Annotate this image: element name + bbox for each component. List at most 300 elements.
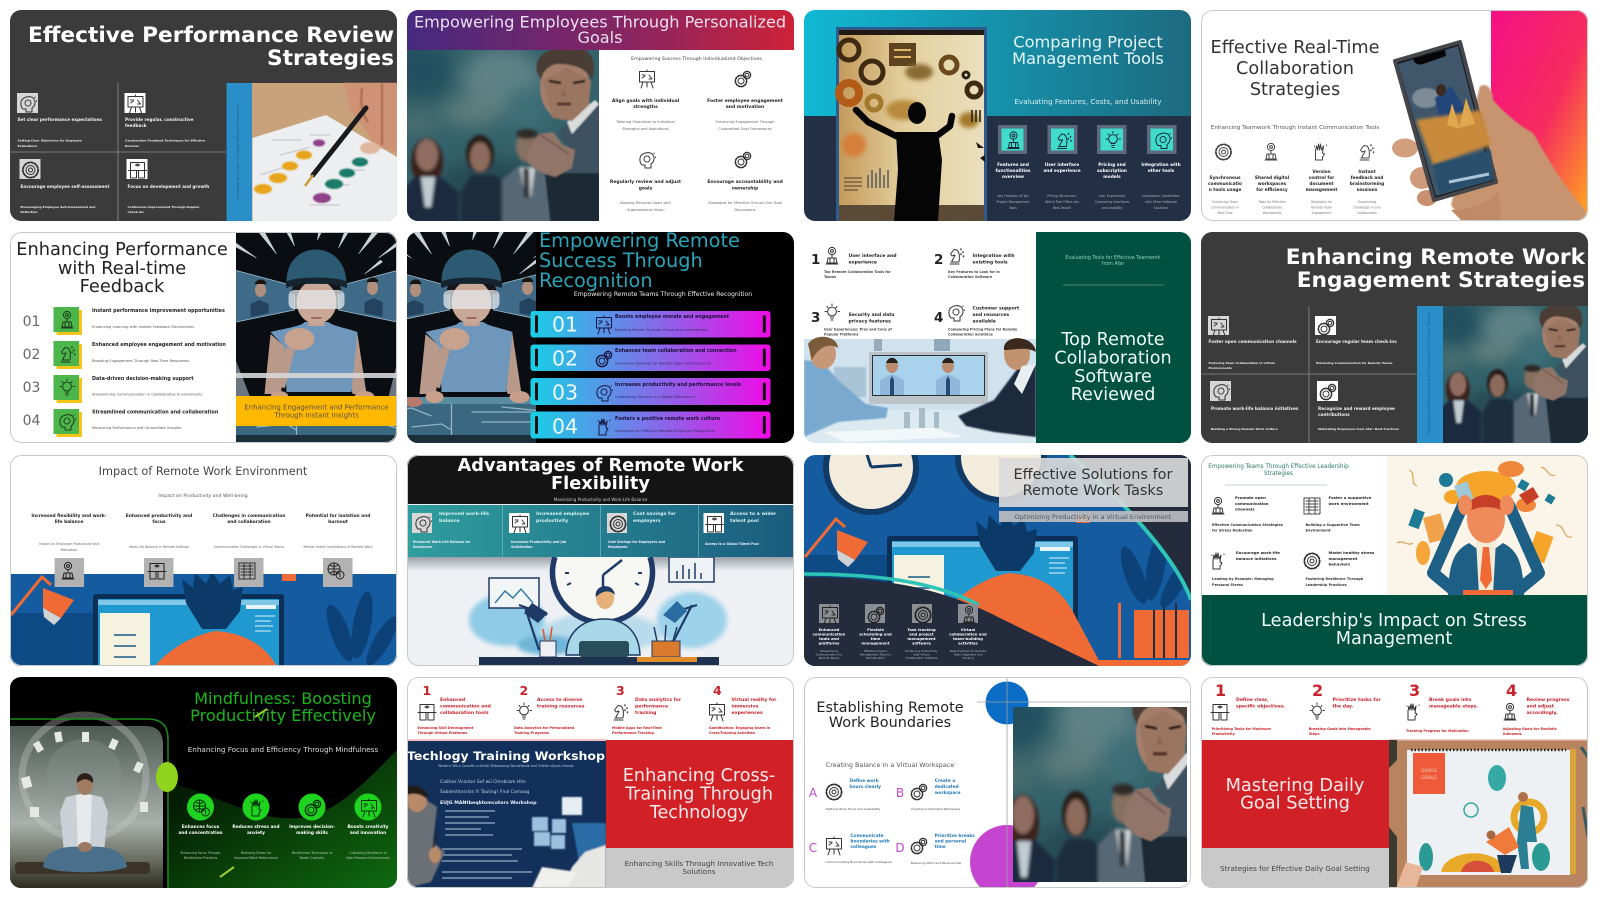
panel: Establishing Remote Work Boundaries bbox=[804, 677, 1208, 900]
strategy labels: management bbox=[1306, 187, 1337, 193]
feature captions: Which Tool Offers the bbox=[1045, 200, 1079, 204]
benefit labels: Improves decision- bbox=[289, 824, 335, 830]
cell: communication channels: Environments bbox=[1208, 366, 1232, 370]
title box bbox=[606, 740, 794, 848]
photo: woman in visor bbox=[236, 232, 397, 443]
column labels: and collaboration bbox=[227, 519, 271, 525]
panel: Effective Solutions for Remote Work Tasks bbox=[802, 411, 1197, 673]
item: open communication bbox=[1212, 495, 1283, 532]
feature labels: Features and bbox=[997, 162, 1029, 168]
step 2 bbox=[1309, 681, 1382, 736]
icon: gear head bbox=[17, 93, 38, 113]
step 3: tracking bbox=[635, 710, 656, 716]
boundary B bbox=[896, 778, 961, 811]
strategy captions: Collaborative bbox=[1262, 206, 1282, 210]
step 2: Training Programs bbox=[514, 731, 549, 735]
icon: easel bbox=[124, 93, 146, 113]
title: Strategies bbox=[1250, 80, 1340, 100]
strategy captions: Remote Team bbox=[1311, 206, 1332, 210]
panel: Comparing Project Management Tools bbox=[804, 10, 1191, 221]
benefit labels: Enhances focus bbox=[182, 824, 220, 830]
title: Establishing Remote bbox=[816, 700, 964, 716]
bar 03: 03 bbox=[552, 380, 578, 404]
benefit band: Employees bbox=[413, 545, 432, 549]
solution captions: Effective Project bbox=[864, 649, 888, 653]
feature captions: with Other Software bbox=[1145, 200, 1177, 204]
benefit labels: making skills bbox=[296, 830, 328, 836]
column labels: Challenges in communication bbox=[213, 513, 285, 519]
photo: notebook with goals: GOALS bbox=[1421, 769, 1437, 774]
step 1 bbox=[418, 683, 491, 735]
item 1: 1 bbox=[811, 252, 820, 268]
subtitle box bbox=[1201, 848, 1389, 888]
item 1: experience bbox=[848, 260, 877, 266]
list item 01 bbox=[23, 307, 225, 335]
strategy labels: for efficiency bbox=[1256, 187, 1288, 193]
header gradient with title: Goals bbox=[577, 28, 623, 47]
photo: hand holding phone bbox=[1392, 42, 1588, 222]
cell: recognition: Motivating Employees from Afar: Best Practices bbox=[1318, 427, 1399, 431]
feature labels: and experience bbox=[1043, 168, 1081, 174]
cell: communication channels bbox=[1208, 316, 1297, 370]
boundary C: boundaries with bbox=[850, 838, 890, 844]
boundary D: D bbox=[895, 841, 905, 855]
strategy captions: Real-Time bbox=[1217, 211, 1233, 215]
benefit band: Enhanced Work-Life Balance for bbox=[413, 540, 471, 544]
step 3: 3 bbox=[616, 683, 625, 698]
column captions: Communication Challenges in Virtual Teams bbox=[214, 545, 284, 549]
strategy captions: Tools for Effective bbox=[1257, 200, 1286, 204]
panel: Enhancing Cross-Training Through Technology bbox=[407, 677, 794, 888]
benefit band: balance bbox=[439, 518, 460, 524]
step 3: Break goals into bbox=[1429, 698, 1471, 703]
item: work-life balance: balance initiatives bbox=[1236, 556, 1277, 561]
cell: recognition: contributions bbox=[1318, 412, 1350, 417]
boundary D bbox=[895, 833, 975, 865]
list item 03: Streamlining Communication in Collaborative Environments bbox=[92, 392, 203, 396]
cell: recognition bbox=[1317, 381, 1399, 431]
photo: video conference bbox=[804, 337, 1036, 443]
feature captions: Tools bbox=[1008, 206, 1017, 210]
strategy captions: Workspaces bbox=[1263, 211, 1282, 215]
boundary A: Define work bbox=[850, 779, 879, 784]
solution captions: Streamlining bbox=[820, 649, 838, 653]
block: foster engagement: and motivation bbox=[726, 104, 764, 110]
bar 01: 01 bbox=[552, 312, 578, 336]
item 3: Popular Platforms bbox=[824, 332, 859, 336]
benefit captions: Cultivating Resilience in bbox=[349, 851, 387, 855]
title: Mindfulness: Boosting bbox=[194, 689, 372, 708]
feature captions: Solutions bbox=[1154, 206, 1169, 210]
cell: work-life balance: Promote work-life balance initiatives bbox=[1211, 406, 1298, 411]
item 2: existing tools bbox=[972, 260, 1008, 266]
strategy captions: Enhancing Team bbox=[1212, 200, 1238, 204]
illustration: worker at laptop bbox=[10, 574, 397, 666]
photo: man pointing bbox=[1443, 306, 1588, 443]
feature captions: Comparing Interfaces bbox=[1095, 200, 1130, 204]
strategy labels: n tools usage bbox=[1209, 187, 1241, 193]
solution captions: Collaboration Software bbox=[906, 656, 938, 660]
illustration: worker at laptop bbox=[802, 411, 1197, 673]
solution labels: software bbox=[912, 640, 931, 646]
solution captions: Remote Work bbox=[866, 656, 885, 660]
item: supportive environment bbox=[1304, 495, 1372, 532]
photo: technology training workshop: Sabileshtosrlos Yi Tauling! Fnol Comoug bbox=[440, 789, 530, 795]
column labels: Enhanced productivity and bbox=[126, 513, 192, 519]
step 3: 3 bbox=[1409, 681, 1420, 700]
item: supportive environment: Foster a supportive bbox=[1328, 495, 1371, 500]
boundary B: Creating a Dedicated Workspace bbox=[911, 807, 960, 811]
block: accountability bbox=[707, 179, 783, 212]
solution labels: scheduling and bbox=[859, 632, 892, 636]
item 3: 3 bbox=[811, 310, 820, 326]
title box bbox=[999, 458, 1188, 507]
bar 04: Strategies for Effective Remote Employee Recognition bbox=[615, 429, 716, 433]
photo: notebook with goals bbox=[1389, 739, 1588, 888]
step 2: 2 bbox=[1312, 681, 1323, 700]
block: foster engagement: Customized Goal Frameworks bbox=[718, 127, 772, 131]
block: set clear expectations: Setting Clear Objectives for Employee bbox=[18, 138, 82, 142]
solution captions: with Virtual bbox=[914, 652, 930, 656]
boundary C: Communicate bbox=[850, 834, 884, 839]
step 4: Cross-Training Activities bbox=[709, 731, 755, 735]
item: open communication: Effective Communication Strategies bbox=[1212, 523, 1283, 527]
strategy labels: Version bbox=[1312, 169, 1331, 175]
panel: Advantages of Remote Work Flexibility bbox=[407, 455, 794, 666]
panel: Enhancing Remote Work Engagement Strategies bbox=[1201, 232, 1596, 455]
solution captions: Communication for bbox=[816, 652, 843, 656]
block: self assessment: Encouraging Employee Self-Assessment and bbox=[20, 205, 95, 209]
step 3 bbox=[612, 683, 682, 735]
solution labels: Flexible bbox=[867, 627, 884, 632]
subtitle box bbox=[606, 848, 794, 888]
icon row bbox=[819, 604, 978, 624]
solution labels: management bbox=[907, 636, 936, 641]
subtitle: Impact on Productivity and Well-being bbox=[158, 493, 248, 499]
benefit band: Employees bbox=[608, 545, 627, 549]
block: foster engagement: Enhancing Engagement Through bbox=[716, 120, 774, 124]
title: Enhancing Performance bbox=[16, 239, 228, 260]
boundary B: B bbox=[896, 786, 904, 800]
step 4: Adjusting Goals for Realistic bbox=[1503, 727, 1557, 731]
item 4 bbox=[934, 306, 1020, 336]
item: work-life balance bbox=[1212, 550, 1280, 587]
bar 02 bbox=[530, 344, 770, 371]
boundary D: Prioritize breaks bbox=[935, 834, 975, 839]
bar 02: 02 bbox=[552, 346, 578, 370]
feature labels: functionalities bbox=[996, 168, 1031, 174]
strategy labels: document bbox=[1309, 181, 1334, 187]
icon: screen bbox=[126, 159, 148, 179]
title: Recognition bbox=[539, 269, 653, 292]
benefit labels: and concentration bbox=[178, 830, 223, 836]
feature labels: subscription bbox=[1097, 168, 1127, 174]
header with title: Flexibility bbox=[551, 473, 650, 494]
heading block: Empowering Teams Through Effective Leadership bbox=[1208, 464, 1349, 470]
benefit band: Improved work-life bbox=[439, 511, 489, 517]
boundary B: Create a bbox=[935, 779, 955, 784]
feature labels: User interface bbox=[1045, 162, 1079, 168]
block: provide feedback: Provide regular, constructive bbox=[125, 117, 193, 122]
benefit captions: High-Pressure Environments bbox=[346, 856, 390, 860]
block: review goals bbox=[610, 179, 682, 212]
header gradient with title: Empowering Employees Through Personalized bbox=[414, 12, 786, 32]
block: development and growth: Continuous Improvement Through Regular bbox=[128, 205, 200, 209]
lime badge bbox=[156, 762, 178, 792]
green wave bbox=[168, 750, 397, 888]
title: Management Tools bbox=[1012, 49, 1164, 68]
photo: technology training workshop: Calities Vcontor Sof wii Chrobram Hits bbox=[440, 780, 526, 785]
solution captions: Best Practices for Remote bbox=[950, 649, 986, 653]
title: Work Boundaries bbox=[829, 715, 951, 731]
block: development and growth: Focus on development and growth bbox=[128, 184, 209, 189]
step 1: Prioritizing Tasks for Maximum bbox=[1212, 727, 1271, 731]
item 4: Comparing Pricing Plans for Remote bbox=[948, 328, 1017, 332]
item: work-life balance: Personal Stress bbox=[1212, 583, 1243, 587]
benefit captions: Mindfulness Techniques to bbox=[292, 851, 332, 855]
title: Effective Real-Time bbox=[1211, 38, 1379, 58]
title: Strategies bbox=[267, 46, 394, 71]
item 1: User interface and bbox=[848, 254, 897, 259]
strategy labels: communicatio bbox=[1208, 181, 1242, 187]
header with title: Advantages of Remote Work bbox=[458, 455, 743, 476]
item 3: User Experiences: Pros and Cons of bbox=[824, 328, 892, 332]
step 2: Data Analytics for Personalized bbox=[514, 726, 574, 730]
block: self assessment: Reflection bbox=[20, 210, 38, 214]
item 4: available bbox=[972, 318, 996, 324]
title box: Remote Work Tasks bbox=[1023, 483, 1163, 499]
photo: technology training workshop: Wisteric We-a Couzrfis ccrrfusti Telbescong Tanmefesde and Tristhe sQusis hiiandy bbox=[438, 764, 574, 768]
boundary C: C bbox=[809, 841, 817, 855]
green frame line bbox=[10, 719, 168, 888]
list item 03: 03 bbox=[23, 380, 40, 396]
photo: woman in visor bbox=[407, 232, 536, 443]
benefit band: Cost savings for bbox=[633, 511, 676, 517]
solution labels: activities bbox=[958, 640, 979, 646]
title: with Real-time bbox=[58, 258, 186, 279]
block: provide feedback: Reviews bbox=[125, 144, 139, 148]
subtitle box: Optimizing Productivity in a Virtual Environment bbox=[1015, 513, 1172, 521]
boundary C: Communicating Boundaries with Colleagues bbox=[826, 860, 892, 864]
feature labels: other tools bbox=[1148, 168, 1175, 174]
bar 04: 04 bbox=[552, 414, 578, 438]
solution labels: Task tracking bbox=[907, 627, 936, 632]
step 3: manageable steps. bbox=[1429, 704, 1478, 710]
strategy labels: Instant bbox=[1358, 169, 1376, 175]
overlay band bbox=[236, 373, 397, 426]
step 2 bbox=[514, 683, 585, 735]
benefit captions: Boost Creativity bbox=[300, 856, 325, 860]
benefit labels: and innovation bbox=[350, 830, 386, 836]
green panel text: Collaboration bbox=[1054, 348, 1172, 368]
benefit captions: Enhancing Focus Through bbox=[181, 851, 220, 855]
strategy labels: workspaces bbox=[1258, 181, 1287, 187]
title: Engagement Strategies bbox=[1297, 268, 1585, 293]
sidebar strip: Maximizing Growth Through Effective Feedback bbox=[235, 104, 240, 199]
photo: technology training workshop: EUJG MANtbeqktomcotors Workshop bbox=[440, 800, 537, 806]
subtitle: Enhancing Teamwork Through Instant Communication Tools bbox=[1211, 125, 1379, 131]
step 2: Prioritize tasks for bbox=[1333, 698, 1381, 703]
benefit band: Increased Productivity and Job bbox=[511, 540, 567, 544]
strategy captions: Overcoming bbox=[1358, 200, 1376, 204]
item: healthy behaviors: Leadership Practices bbox=[1306, 583, 1347, 587]
column captions: Mental Health Implications of Remote Work bbox=[303, 545, 373, 549]
step 2: the day. bbox=[1333, 704, 1354, 710]
feature captions: and Usability bbox=[1102, 206, 1122, 210]
benefit labels: Reduces stress and bbox=[232, 824, 280, 830]
subtitle box: Solutions bbox=[682, 867, 716, 876]
item: open communication: Promote open bbox=[1235, 495, 1266, 500]
green panel text: from Afar bbox=[1102, 261, 1124, 267]
step 3: Performance Tracking bbox=[612, 731, 654, 735]
item 4: 4 bbox=[934, 310, 943, 326]
panel: Top Remote Collaboration Software Reviewed bbox=[804, 232, 1191, 443]
header gradient with title bbox=[407, 10, 794, 50]
step 4: experiences bbox=[732, 710, 763, 716]
panel: Mindfulness Boosting Productivity Effectively bbox=[10, 677, 397, 888]
strategy captions: Engagement bbox=[1312, 211, 1332, 215]
strategy labels: brainstorming bbox=[1350, 181, 1384, 187]
title: Feedback bbox=[80, 276, 165, 297]
cell: communication channels: Foster open communication channels bbox=[1208, 339, 1297, 344]
list item 01: Instant performance improvement opportunities bbox=[92, 308, 225, 314]
column labels: life balance bbox=[55, 519, 83, 525]
bar 02: Enhances team collaboration and connection bbox=[615, 348, 737, 354]
list item 02: Enhanced employee engagement and motivation bbox=[92, 342, 226, 348]
bar 01: Boosts employee morale and engagement bbox=[615, 314, 730, 320]
title box: Training Through bbox=[624, 784, 773, 804]
green panel text: Top Remote bbox=[1061, 330, 1165, 350]
title: Success Through bbox=[539, 249, 703, 272]
icon: easel bbox=[640, 70, 654, 88]
overlay band: Enhancing Engagement and Performance bbox=[244, 404, 389, 412]
panel: Empowering Employees Through Personalized Goals bbox=[407, 10, 794, 221]
block: align goals: strengths bbox=[633, 104, 658, 110]
solution labels: collaboration and bbox=[949, 632, 987, 636]
solution captions: Tracking bbox=[961, 656, 974, 660]
item: open communication: channels bbox=[1235, 506, 1255, 512]
step 1: Define clear, bbox=[1236, 698, 1268, 703]
bar 01: Boosting Morale Through Virtual Acknowledgment bbox=[615, 328, 708, 332]
benefit band: Access to a wider bbox=[730, 511, 777, 517]
panel: Effective Performance Review Strategies bbox=[10, 10, 397, 221]
solution labels: time bbox=[871, 636, 881, 641]
subtitle box: Strategies for Effective Daily Goal Setting bbox=[1220, 864, 1370, 873]
column labels: burnout bbox=[328, 519, 348, 525]
block: set clear expectations: Set clear performance expectations bbox=[18, 117, 102, 122]
strategy labels: sessions bbox=[1357, 187, 1378, 193]
column labels: Potential for isolation and bbox=[306, 513, 370, 519]
illustration: stressed leader bbox=[1387, 455, 1588, 596]
cell: communication channels: Fostering Team Collaboration in Virtual bbox=[1208, 361, 1275, 365]
feature captions: Best Value? bbox=[1053, 206, 1072, 210]
title: Collaboration bbox=[1236, 59, 1354, 79]
sidebar strip: Maximizing Productivity and Connection in Virtual Teams bbox=[1426, 313, 1431, 433]
list item 02: 02 bbox=[23, 347, 40, 363]
subtitle: Creating Balance in a Virtual Workspace bbox=[826, 761, 954, 769]
benefit band: productivity bbox=[536, 518, 568, 524]
step 1: 1 bbox=[422, 683, 431, 698]
solution captions: Remote Teams bbox=[819, 656, 840, 660]
step 4: Outcomes bbox=[1503, 732, 1522, 736]
boundary D: Balancing Work and Personal Life bbox=[911, 861, 961, 865]
block: provide feedback: Constructive Feedback Techniques for Effective bbox=[125, 138, 205, 142]
step 4: 4 bbox=[1506, 681, 1517, 700]
boundary D: time bbox=[935, 844, 946, 850]
bar 01 bbox=[530, 311, 770, 338]
item: open communication: for Stress Reduction bbox=[1212, 528, 1253, 532]
item: healthy behaviors: Fostering Resilience Through bbox=[1306, 577, 1363, 581]
photo: notebook with goals: GOALS bbox=[1421, 775, 1437, 781]
boundary A: hours clearly bbox=[850, 784, 881, 790]
feature captions: User Experience: bbox=[1098, 194, 1126, 198]
step 1: Through Virtual Platforms bbox=[418, 731, 467, 735]
banner with title bbox=[1201, 595, 1588, 666]
solution labels: management bbox=[861, 640, 890, 646]
illustration: worker and clock bbox=[407, 557, 794, 665]
boundary D: and personal bbox=[935, 838, 967, 844]
benefit captions: Mindfulness Practices bbox=[184, 856, 218, 860]
title: Impact of Remote Work Environment bbox=[99, 465, 308, 478]
item 1: Top Remote Collaboration Tools for bbox=[824, 270, 891, 274]
banner with title: Management bbox=[1336, 629, 1452, 649]
title box bbox=[1201, 740, 1389, 848]
panel: Mastering Daily Goal Setting bbox=[1201, 677, 1588, 888]
step 4: Virtual reality for bbox=[732, 698, 776, 703]
green panel text: Reviewed bbox=[1071, 385, 1155, 405]
step 3: performance bbox=[635, 704, 668, 710]
step 1: collaboration tools bbox=[440, 710, 489, 716]
cell: team check-ins bbox=[1315, 316, 1397, 365]
strategy captions: Strategies for bbox=[1311, 200, 1333, 204]
photo: man pointing bbox=[1013, 707, 1187, 882]
photo: meditating man bbox=[10, 715, 163, 888]
panel: Enhancing Performance with Real-time Feedback bbox=[10, 232, 406, 443]
item 1: Teams bbox=[824, 275, 836, 279]
benefit band: Increased employee bbox=[536, 511, 589, 517]
step 1: specific objectives. bbox=[1236, 704, 1286, 710]
step 2: Steps bbox=[1309, 732, 1320, 736]
heading block bbox=[1208, 464, 1349, 485]
title box: Technology bbox=[649, 803, 748, 823]
block: development and growth: Check-ins bbox=[128, 210, 144, 214]
boundary C: colleagues bbox=[850, 844, 877, 850]
bar 02: Innovative Rewards for Remote Team Achievements bbox=[615, 362, 711, 366]
icon row bbox=[187, 794, 382, 820]
feature labels: Integration with bbox=[1141, 162, 1181, 168]
feature labels: Pricing and bbox=[1098, 162, 1126, 168]
column captions: Motivation bbox=[61, 548, 77, 552]
title: Empowering Remote bbox=[539, 229, 740, 252]
item 3: privacy features bbox=[848, 318, 891, 324]
step 4: and adjust bbox=[1526, 704, 1555, 710]
item 3 bbox=[811, 304, 894, 336]
step 3 bbox=[1406, 681, 1478, 733]
benefit band: talent pool bbox=[730, 518, 759, 524]
feature captions: Project Management bbox=[997, 200, 1030, 204]
photo: technology training workshop bbox=[407, 739, 606, 888]
solution captions: Management Tools for bbox=[860, 652, 892, 656]
item: work-life balance: Encourage work-life bbox=[1236, 550, 1280, 555]
list item 04: 04 bbox=[23, 413, 40, 429]
green panel text: Evaluating Tools for Effective Teamwork bbox=[1065, 256, 1161, 261]
strategy labels: control for bbox=[1309, 175, 1335, 181]
strategy labels: Synchronous bbox=[1209, 175, 1241, 181]
heading block: Strategies bbox=[1264, 471, 1293, 477]
boundary A: A bbox=[809, 786, 818, 800]
step 3: Tracking Progress for Motivation bbox=[1406, 729, 1469, 733]
subtitle: Empowering Success Through Individualized Objectives bbox=[631, 56, 762, 62]
